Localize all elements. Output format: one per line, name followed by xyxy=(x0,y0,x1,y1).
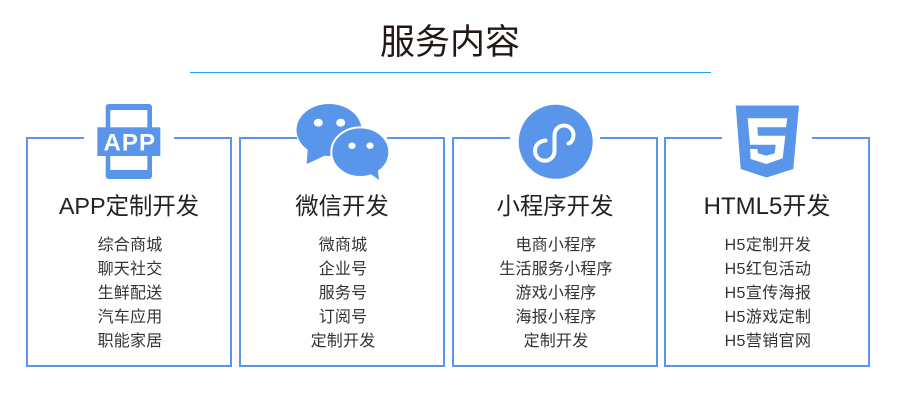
list: mini program services xyxy=(499,236,613,350)
list: WeChat services: 服务号 xyxy=(319,285,367,302)
list: mini program services: 生活服务小程序 xyxy=(499,261,613,278)
heading: HTML5开发: HTML5开发 xyxy=(704,193,830,220)
icon: APP phone: APP xyxy=(104,130,155,156)
heading: 小程序开发: 小程序开发 xyxy=(497,193,613,219)
list: WeChat services: 微商城 xyxy=(319,237,367,254)
list: HTML5 services: H5营销官网 xyxy=(725,333,811,350)
icon: mini program xyxy=(519,105,593,179)
title: 服务内容 xyxy=(380,23,520,62)
list: APP services: 职能家居 xyxy=(98,333,162,350)
panel: 小程序开发 xyxy=(452,137,658,367)
list: HTML5 services: H5红包活动 xyxy=(725,261,811,278)
list: HTML5 services: H5定制开发 xyxy=(725,237,811,254)
list: mini program services: 海报小程序 xyxy=(515,309,596,326)
list: HTML5 services xyxy=(725,236,811,350)
list: APP services: 综合商城 xyxy=(98,237,162,254)
list: mini program services: 电商小程序 xyxy=(515,237,596,254)
heading: 微信开发: 微信开发 xyxy=(295,193,389,219)
panel: 微信开发 xyxy=(239,137,445,367)
list: HTML5 services: H5游戏定制 xyxy=(725,309,811,326)
list: APP services: 生鲜配送 xyxy=(98,285,162,302)
list: WeChat services xyxy=(311,236,375,350)
list: WeChat services: 定制开发 xyxy=(311,333,375,350)
list: APP services xyxy=(98,236,162,350)
list: HTML5 services: H5宣传海报 xyxy=(725,285,811,302)
list: mini program services: 游戏小程序 xyxy=(515,285,596,302)
panel: APP开发 xyxy=(26,137,232,367)
list: APP services: 聊天社交 xyxy=(98,261,162,278)
icon: APP phone xyxy=(97,104,160,179)
list: mini program services: 定制开发 xyxy=(524,333,588,350)
icon: HTML5 shield xyxy=(736,106,799,178)
list: APP services: 汽车应用 xyxy=(98,309,162,326)
heading: APP定制开发: APP定制开发 xyxy=(59,193,199,219)
panel: HTML5开发 xyxy=(664,137,870,367)
list: WeChat services: 企业号 xyxy=(319,261,367,278)
list: WeChat services: 订阅号 xyxy=(319,309,367,326)
icon: WeChat bubbles xyxy=(296,104,389,180)
